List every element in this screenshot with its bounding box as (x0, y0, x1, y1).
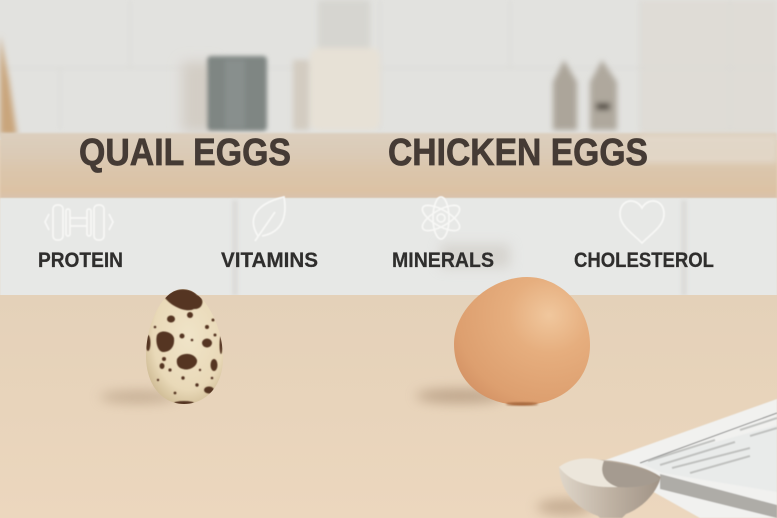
shadow: chicken egg (416, 389, 504, 403)
heading: quail eggs: QUAIL EGGS (79, 132, 291, 174)
icon: leaf (253, 197, 285, 241)
background: salt and pepper shakers (553, 60, 617, 130)
label: vitamins: VITAMINS (221, 248, 318, 272)
icon: heart (620, 201, 664, 243)
background: blurred kitchen wall (0, 0, 777, 140)
background: cutting board at left edge (0, 35, 17, 135)
illustration: nutrition booklet (600, 399, 777, 518)
illustration: metal spoon bowl (559, 458, 661, 518)
illustration: chicken egg (454, 277, 590, 406)
background: glass jar (293, 0, 380, 130)
background: cabinet doors (0, 198, 777, 296)
background: grey canister (182, 56, 267, 132)
illustration: quail egg (146, 289, 223, 405)
background: table top (0, 295, 777, 518)
label: minerals: MINERALS (392, 248, 494, 272)
shadow: quail egg (100, 391, 176, 403)
label: cholesterol: CHOLESTEROL (574, 248, 714, 272)
shadow: spoon (537, 499, 593, 515)
heading: chicken eggs: CHICKEN EGGS (388, 132, 648, 174)
icon: dumbbell (45, 205, 113, 240)
background: counter (0, 133, 777, 199)
label: protein: PROTEIN (38, 248, 123, 272)
icon: atom (419, 197, 463, 239)
